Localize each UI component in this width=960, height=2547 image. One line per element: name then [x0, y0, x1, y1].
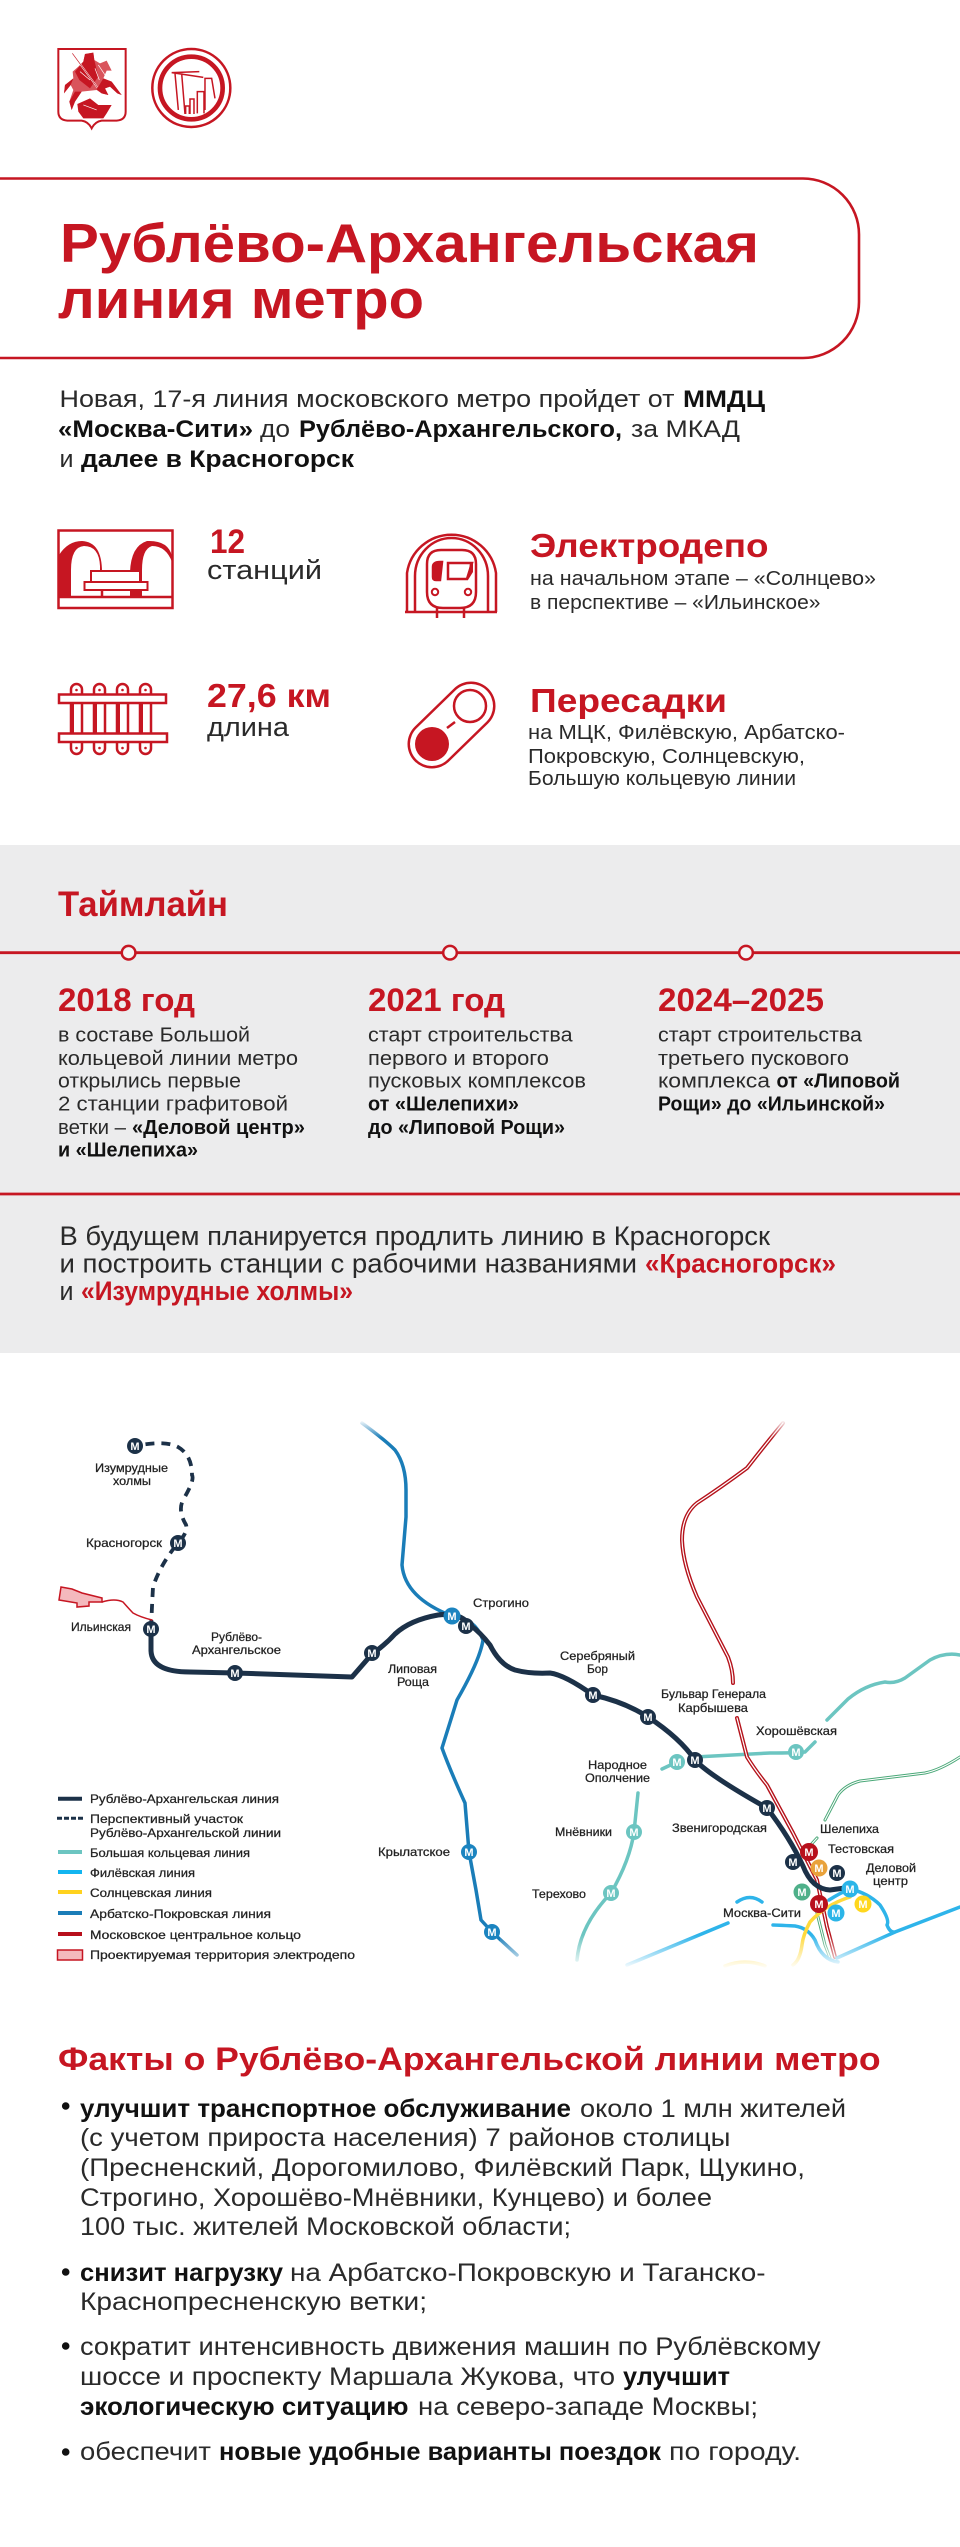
icon: rails — [59, 684, 167, 754]
future extension note: и — [60, 1276, 74, 1306]
logo: construction complex roundel — [152, 49, 230, 127]
stat: depot — [530, 527, 876, 614]
fact 4: новые удобные варианты поездок — [219, 2438, 661, 2466]
intro text: до — [260, 416, 290, 443]
milestone 2021: старт строительства — [368, 1025, 574, 1047]
intro text: Новая, 17-я линия московского метро пройдет от — [60, 386, 675, 413]
station markers: М — [832, 1868, 842, 1880]
future extension note: В будущем планируется продлить линию в Красногорск — [60, 1221, 770, 1251]
station labels: Звенигородская — [672, 1821, 767, 1835]
station markers: М — [672, 1757, 682, 1769]
station markers: М — [464, 1847, 474, 1859]
map lines — [102, 1420, 960, 1969]
station markers: М — [831, 1908, 841, 1920]
station labels: Изумрудные — [95, 1461, 168, 1475]
milestone 2021: до «Липовой Рощи» — [368, 1117, 565, 1139]
station markers: М — [606, 1888, 616, 1900]
icon: train in tunnel — [405, 535, 497, 618]
future extension note: «Красногорск» — [645, 1249, 836, 1279]
station markers: М — [690, 1755, 700, 1767]
map legend: Проектируемая территория электродепо — [90, 1948, 355, 1962]
stat: transfers: Пересадки — [530, 682, 727, 719]
station markers: М — [588, 1690, 598, 1702]
station labels: Шелепиха — [820, 1822, 879, 1836]
station labels: Мнёвники — [555, 1825, 612, 1839]
milestone 2021: первого и второго — [368, 1048, 549, 1070]
depot territory — [59, 1587, 102, 1607]
milestone 2024-2025: Рощи» до «Ильинской» — [658, 1094, 885, 1116]
intro text: ММДЦ — [683, 386, 766, 413]
map legend: Солнцевская линия — [90, 1886, 212, 1900]
fact 3: улучшит — [623, 2363, 730, 2391]
fact 2: Краснопресненскую ветки; — [80, 2288, 427, 2316]
map legend: Большая кольцевая линия — [90, 1846, 250, 1860]
station labels: Роща — [397, 1675, 429, 1689]
station markers: М — [447, 1611, 457, 1623]
fact 1: около 1 млн жителей — [580, 2095, 846, 2123]
milestone 2018: кольцевой линии метро — [58, 1048, 298, 1070]
fact 4: обеспечит — [80, 2438, 212, 2466]
milestone 2018: ветки – — [58, 1117, 127, 1139]
map legend: Рублёво-Архангельская линия — [90, 1792, 279, 1806]
fact 1: (Пресненский, Дорогомилово, Филёвский Парк, Щукино, — [80, 2154, 805, 2182]
intro text: и — [60, 446, 74, 473]
fact 3: на северо-западе Москвы; — [418, 2393, 758, 2421]
fact 1: (с учетом прироста населения) 7 районов столицы — [80, 2124, 730, 2152]
stat: transfers: Покровскую, Солнцевскую, — [528, 746, 805, 768]
station markers — [127, 1438, 872, 1940]
milestone 2018: в составе Большой — [58, 1025, 250, 1047]
milestone 2018: открылись первые — [58, 1071, 241, 1093]
future extension note — [60, 1221, 836, 1306]
station markers: М — [461, 1621, 471, 1633]
station labels: Деловой — [866, 1861, 916, 1875]
stat: depot: Электродепо — [530, 527, 768, 564]
station labels: Архангельское — [192, 1643, 281, 1657]
station markers: М — [858, 1899, 868, 1911]
station labels: Ильинская — [71, 1620, 131, 1634]
fact 1: Строгино, Хорошёво-Мнёвники, Кунцево) и более — [80, 2184, 712, 2212]
station labels — [71, 1461, 916, 1920]
station labels: Карбышева — [678, 1701, 748, 1715]
icon: transfer capsule — [415, 690, 486, 761]
station labels: Красногорск — [86, 1536, 163, 1550]
station labels: Липовая — [388, 1662, 437, 1676]
future extension note: «Изумрудные холмы» — [81, 1276, 353, 1306]
metro map — [57, 1420, 960, 1969]
map legend: Рублёво-Архангельской линии — [90, 1826, 281, 1840]
fact 1: 100 тыс. жителей Московской области; — [80, 2213, 571, 2241]
station markers: М — [629, 1827, 639, 1839]
station labels: Бор — [587, 1662, 608, 1676]
milestone 2024-2025: старт строительства — [658, 1025, 863, 1047]
milestone 2024-2025: комплекса — [658, 1071, 771, 1093]
title — [58, 212, 759, 330]
station markers: М — [804, 1847, 814, 1859]
map legend: Филёвская линия — [90, 1866, 195, 1880]
map legend — [57, 1792, 355, 1962]
facts heading: Факты о Рублёво-Архангельской линии метро — [58, 2041, 881, 2077]
station labels: Крылатское — [378, 1845, 450, 1859]
station markers: М — [230, 1668, 240, 1680]
stat: length — [207, 677, 331, 742]
fact 4 — [62, 2438, 801, 2466]
station markers: М — [797, 1887, 807, 1899]
station labels: Москва-Сити — [723, 1906, 801, 1920]
station markers: М — [814, 1863, 824, 1875]
milestone 2018: 2 станции графитовой — [58, 1094, 288, 1116]
station labels: Серебряный — [560, 1649, 635, 1663]
map legend: Московское центральное кольцо — [90, 1928, 301, 1942]
station labels: холмы — [113, 1474, 151, 1488]
stat: transfers: на МЦК, Филёвскую, Арбатско- — [528, 722, 845, 744]
fact 2: снизит нагрузку — [80, 2259, 283, 2287]
milestone 2024-2025: 2024–2025 — [658, 982, 824, 1018]
title box — [0, 178, 859, 358]
stat: length: 27,6 км — [207, 677, 331, 714]
station markers: М — [146, 1624, 156, 1636]
title: линия метро — [58, 268, 424, 330]
map legend: Арбатско-Покровская линия — [90, 1907, 271, 1921]
milestone 2024-2025: от «Липовой — [776, 1071, 900, 1093]
intro text: далее в Красногорск — [81, 446, 355, 473]
station markers: М — [788, 1857, 798, 1869]
fact 3: экологическую ситуацию — [80, 2393, 408, 2421]
station markers: М — [762, 1803, 772, 1815]
milestone 2021: от «Шелепихи» — [368, 1094, 519, 1116]
station labels: Хорошёвская — [756, 1724, 837, 1738]
timeline rail with markers — [0, 946, 960, 960]
fact 3: сократит интенсивность движения машин по Рублёвскому — [80, 2333, 821, 2361]
icon: station — [58, 530, 173, 608]
station markers: М — [643, 1712, 653, 1724]
title: Рублёво-Архангельская — [60, 212, 759, 274]
station markers: М — [814, 1899, 824, 1911]
station labels: центр — [873, 1874, 908, 1888]
intro text: «Москва-Сити» — [58, 416, 253, 443]
milestone 2021 — [368, 982, 586, 1139]
milestone 2018: 2018 год — [58, 982, 195, 1018]
intro text: Рублёво-Архангельского, — [299, 416, 622, 443]
milestone 2024-2025 — [658, 982, 900, 1116]
station labels: Бульвар Генерала — [661, 1687, 766, 1701]
fact 2: на Арбатско-Покровскую и Таганско- — [290, 2259, 766, 2287]
fact 3 — [62, 2333, 821, 2421]
stat: transfers — [528, 682, 845, 790]
map legend: Перспективный участок — [90, 1812, 244, 1826]
milestone 2021: пусковых комплексов — [368, 1071, 586, 1093]
milestone 2024-2025: третьего пускового — [658, 1048, 849, 1070]
stat: transfers: Большую кольцевую линии — [528, 768, 796, 790]
logo: Moscow coat of arms — [58, 49, 126, 128]
timeline heading: Таймлайн — [58, 885, 228, 924]
stat: depot: на начальном этапе – «Солнцево» — [530, 568, 876, 590]
milestone 2018: «Деловой центр» — [132, 1117, 305, 1139]
stat: stations — [207, 523, 322, 585]
intro text: за МКАД — [631, 416, 740, 443]
station labels: Тестовская — [828, 1842, 894, 1856]
station markers: М — [173, 1538, 183, 1550]
station labels: Рублёво- — [211, 1630, 262, 1644]
facts list — [62, 2095, 846, 2466]
fact 1 — [62, 2095, 846, 2241]
fact 4: по городу. — [669, 2438, 801, 2466]
station markers: М — [130, 1441, 140, 1453]
stat: stations: станций — [207, 555, 322, 585]
stat: length: длина — [207, 712, 290, 742]
milestone 2018 — [58, 982, 305, 1162]
stat: depot: в перспективе – «Ильинское» — [530, 592, 820, 614]
station markers: М — [845, 1884, 855, 1896]
stat: stations: 12 — [210, 523, 245, 561]
panel: timeline — [0, 845, 960, 1353]
station labels: Терехово — [532, 1887, 586, 1901]
station markers: М — [487, 1927, 497, 1939]
fact 2 — [62, 2259, 765, 2316]
fact 3: шоссе и проспекту Маршала Жукова, что — [80, 2363, 615, 2391]
station markers: М — [791, 1747, 801, 1759]
station labels: Ополчение — [585, 1771, 650, 1785]
station markers: М — [367, 1648, 377, 1660]
station labels: Строгино — [473, 1596, 529, 1610]
intro text — [58, 386, 766, 473]
future extension note: и построить станции с рабочими названиями — [60, 1249, 637, 1279]
milestone 2021: 2021 год — [368, 982, 505, 1018]
milestone 2018: и «Шелепиха» — [58, 1140, 198, 1162]
fact 1: улучшит транспортное обслуживание — [80, 2095, 571, 2123]
station labels: Народное — [588, 1758, 647, 1772]
